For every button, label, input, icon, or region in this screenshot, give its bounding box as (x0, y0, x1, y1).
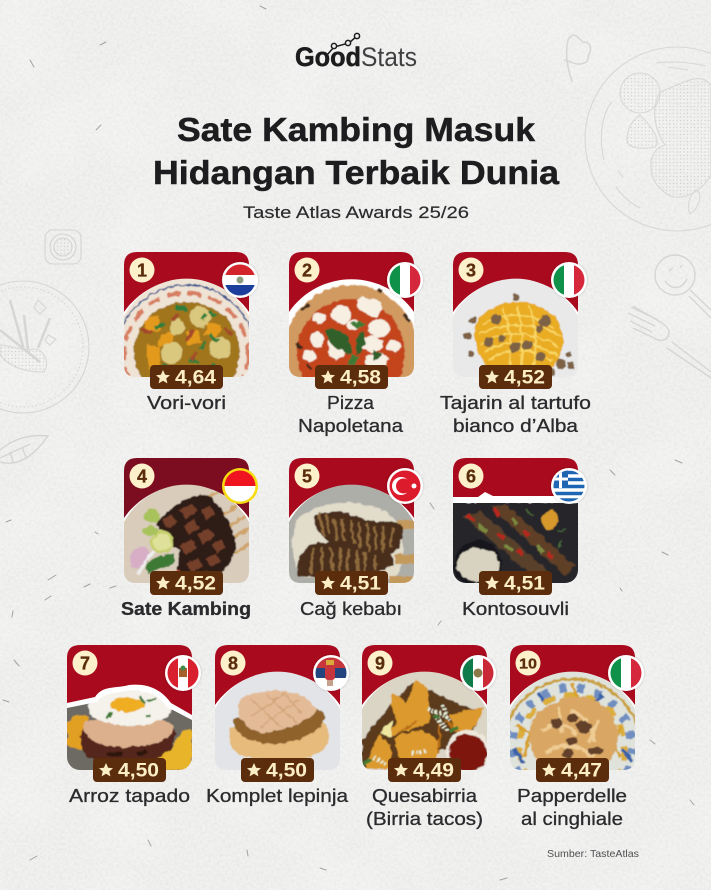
flag: Greece (551, 468, 587, 504)
rank number: 7 (80, 654, 90, 674)
decoration: fork (628, 306, 711, 378)
rating badge: 4,58 (340, 368, 381, 388)
food photo: sate (124, 484, 249, 583)
subtitle: Taste Atlas Awards 25/26 (243, 204, 469, 222)
logo: GoodStats (295, 33, 417, 72)
food photo: arroz tapado (67, 690, 192, 770)
rating badge: 4,50 (266, 760, 307, 782)
rating badge: 4,51 (504, 574, 545, 594)
flag: Paraguay (222, 262, 258, 298)
rank number: 1 (137, 260, 147, 280)
labels: dish names: Vori-vori (147, 393, 226, 413)
card 6: Kontosouvli (447, 458, 587, 595)
rank number: 10 (519, 656, 537, 672)
rating badge (150, 365, 223, 389)
decoration: plate left (0, 281, 89, 413)
labels: dish names: bianco d’Alba (453, 416, 579, 436)
rating badge: 4,52 (504, 368, 545, 388)
food photo: kontosouvli (453, 503, 578, 583)
flag: Italy (551, 262, 587, 298)
card 1: Vori-vori (124, 252, 259, 389)
card 2: Pizza Napoletana (289, 252, 424, 389)
rating badge (536, 758, 609, 782)
food photo: komplet lepinja (215, 672, 340, 770)
flag: Indonesia (222, 468, 258, 504)
rating badge: 4,52 (175, 574, 216, 594)
rank number (516, 650, 540, 676)
logo: GoodStats: Good (295, 42, 361, 72)
flag: Italy (387, 262, 423, 298)
food photo: cag kebabi (289, 484, 414, 583)
flag: Turkey (387, 468, 423, 504)
card 7: Arroz tapado (61, 645, 201, 782)
decoration: spoon (655, 255, 711, 318)
card 8: Komplet lepinja (209, 645, 349, 782)
food photo: tajarin pasta (453, 278, 578, 377)
rating badge: 4,47 (561, 760, 602, 782)
title: Hidangan Terbaik Dunia (153, 154, 560, 191)
source note: Sumber: TasteAtlas (547, 848, 639, 860)
labels: dish names: Kontosouvli (462, 599, 569, 619)
rank number: 5 (302, 466, 312, 486)
rank number (294, 258, 320, 282)
logo mark: chart line (327, 33, 360, 55)
rank number: 9 (375, 654, 385, 674)
labels: dish names: Cağ kebabı (300, 599, 402, 619)
rank number: 8 (228, 654, 238, 674)
rank number (130, 258, 154, 282)
card 5: Cag kebabi (283, 458, 423, 595)
card 3: Tajarin (447, 252, 587, 389)
rank number: 4 (137, 466, 147, 486)
decoration: square icon (45, 230, 81, 264)
card 9: Quesabirria (356, 645, 496, 782)
labels: dish names (69, 393, 627, 829)
food photo: papperdelle (510, 672, 635, 770)
labels: dish names: Tajarin al tartufo (440, 393, 591, 413)
logo: GoodStats: Stats (361, 42, 417, 72)
labels: dish names: Pizza (327, 393, 375, 413)
decoration: leaf left (0, 436, 48, 463)
labels: dish names: Papperdelle (517, 786, 627, 806)
flag: Mexico (460, 655, 496, 691)
flag: Italy (608, 655, 644, 691)
rating badge: 4,64 (175, 368, 216, 388)
labels: dish names: Quesabirria (372, 786, 478, 806)
rank number: 2 (302, 260, 312, 280)
rank number: 3 (466, 260, 476, 280)
card 10: Papperdelle (510, 645, 645, 782)
decoration: leaf top right (564, 35, 591, 82)
labels: dish names: Napoletana (298, 416, 404, 436)
labels: dish names: Arroz tapado (69, 786, 190, 806)
labels: dish names: Komplet lepinja (206, 786, 349, 806)
rating badge (315, 365, 388, 389)
flag: Peru (165, 655, 201, 691)
labels: dish names: al cinghiale (521, 809, 623, 829)
flag: Serbia (313, 655, 349, 691)
rating badge: 4,49 (413, 760, 454, 782)
decoration: food plate top right (585, 47, 711, 231)
rating badge: 4,50 (118, 760, 159, 782)
labels: dish names: Sate Kambing (121, 599, 251, 619)
card 4: Sate Kambing (118, 458, 258, 595)
title: Sate Kambing Masuk (177, 111, 536, 148)
food photo: soup (124, 278, 249, 377)
food photo: quesabirria (362, 672, 487, 770)
labels: dish names: (Birria tacos) (366, 809, 483, 829)
food photo: pizza (289, 284, 414, 377)
title (153, 111, 560, 191)
rank number: 6 (466, 466, 476, 486)
rating badge: 4,51 (340, 574, 381, 594)
